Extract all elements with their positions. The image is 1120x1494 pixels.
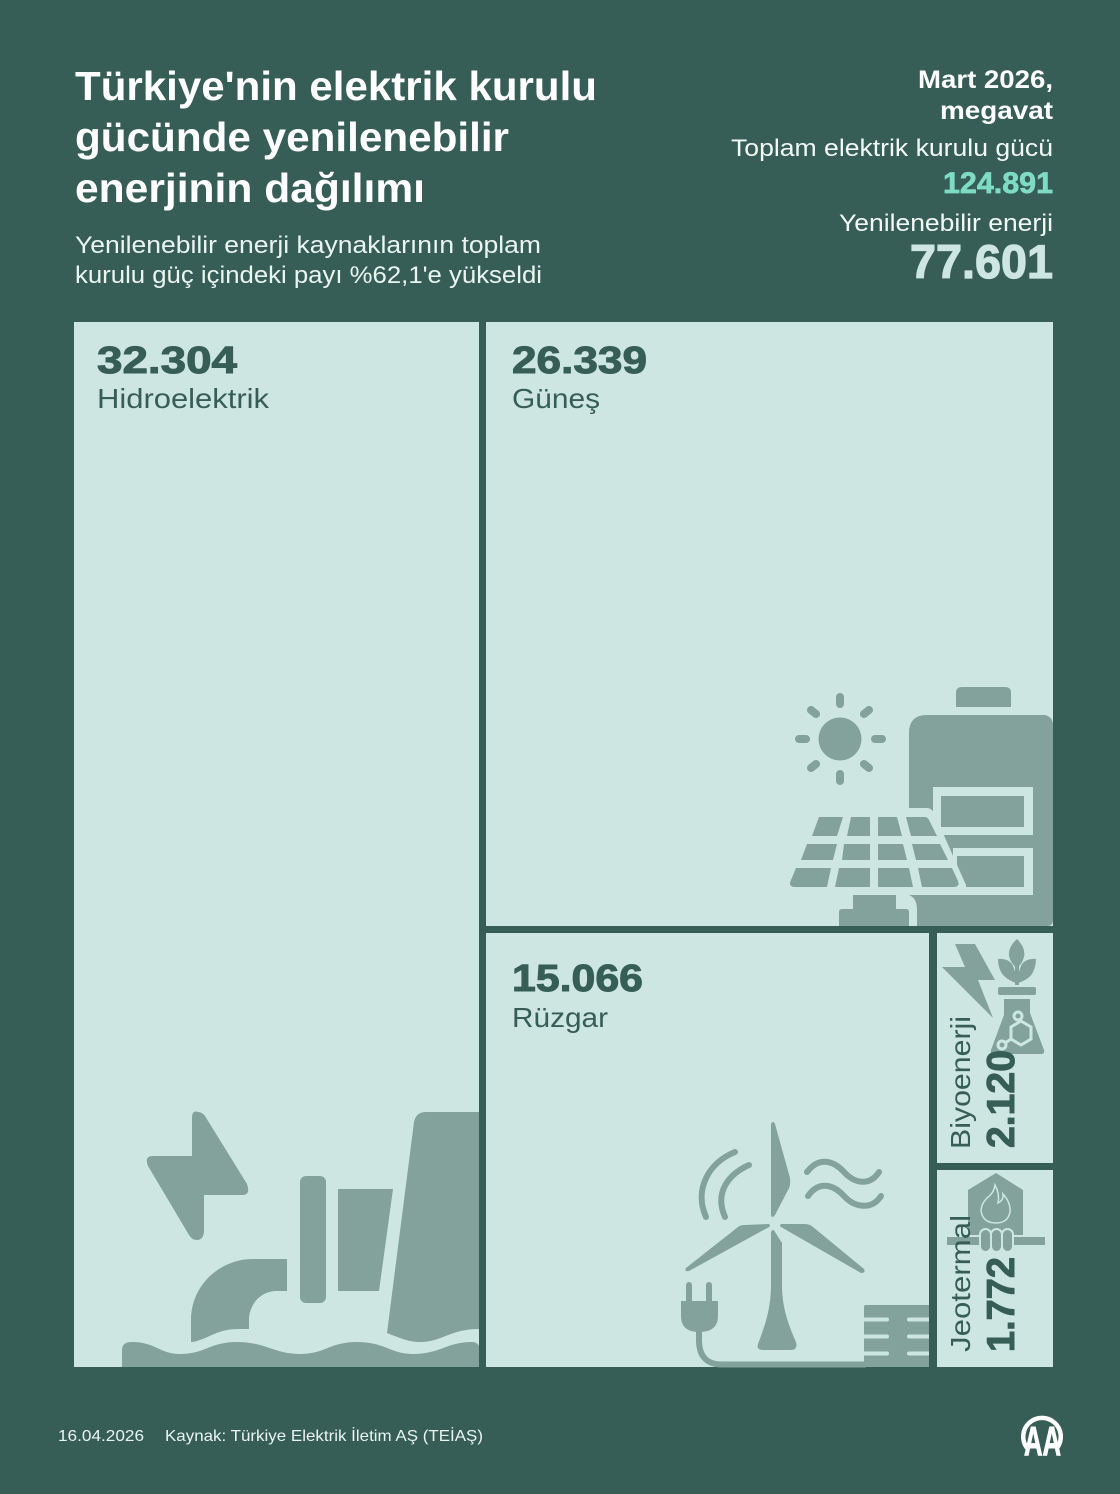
icon: sun — [799, 697, 882, 781]
renewable energy label: Yenilenebilir enerji — [839, 210, 1053, 237]
hydroelectric value: 32.304 — [97, 340, 237, 382]
footer date: 16.04.2026 — [58, 1428, 144, 1445]
panel: solar — [486, 322, 1053, 926]
solar value: 26.339 — [512, 340, 647, 382]
icon: solar panel — [790, 817, 958, 926]
total installed power label: Toplam elektrik kurulu gücü — [731, 135, 1053, 162]
date and unit — [918, 66, 1054, 125]
panel: geothermal — [937, 1170, 1053, 1367]
icon: bolt, leaves and flask — [942, 939, 1044, 1054]
panel: hydroelectric — [74, 322, 479, 1367]
total installed power value: 124.891 — [943, 167, 1053, 200]
logo: AA agency — [1023, 1418, 1061, 1464]
footer source: Kaynak: Türkiye Elektrik İletim AŞ (TEİAŞ) — [165, 1426, 483, 1445]
date and unit: Mart 2026, — [918, 66, 1053, 94]
icon: wind turbine with plug — [681, 1122, 937, 1367]
geothermal value: 1.772 — [980, 1257, 1023, 1352]
solar label: Güneş — [512, 383, 600, 414]
title: gücünde yenilenebilir — [75, 114, 509, 160]
panel: wind — [486, 933, 937, 1367]
subtitle — [75, 232, 542, 289]
logo: AA agency: AA — [1024, 1418, 1061, 1464]
renewable energy value: 77.601 — [910, 235, 1053, 288]
summary: totals in megawatts — [731, 66, 1054, 288]
wind label: Rüzgar — [512, 1002, 608, 1033]
wind value: 15.066 — [512, 958, 643, 1000]
icon: hydroelectric dam — [122, 1112, 479, 1367]
geothermal label: Jeotermal — [945, 1215, 976, 1352]
title: Türkiye'nin elektrik kurulu — [75, 63, 597, 109]
title — [75, 63, 597, 211]
date and unit: megavat — [940, 97, 1054, 125]
icon: battery — [905, 687, 1053, 926]
icon: geothermal house with flame — [947, 1173, 1045, 1252]
panel: bioenergy — [937, 933, 1053, 1163]
hydroelectric label: Hidroelektrik — [97, 383, 270, 414]
bioenergy value: 2.120 — [980, 1050, 1023, 1148]
bioenergy label: Biyoenerji — [945, 1016, 976, 1149]
title: enerjinin dağılımı — [75, 165, 425, 211]
subtitle: kurulu güç içindeki payı %62,1'e yükseldi — [75, 262, 542, 289]
subtitle: Yenilenebilir enerji kaynaklarının toplam — [75, 232, 541, 259]
wind panel edge cover — [929, 1300, 937, 1367]
